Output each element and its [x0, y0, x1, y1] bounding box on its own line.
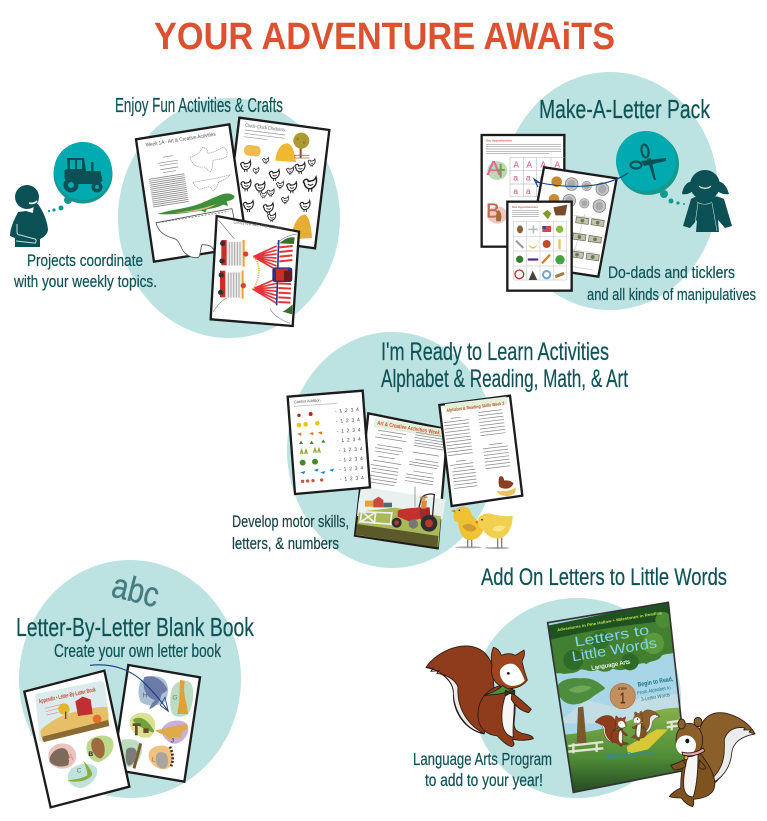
worksheet: letter grid: B [486, 199, 500, 222]
heading: letter pack: Make-A-Letter Pack [539, 94, 711, 124]
worksheet: coins and bills [526, 167, 617, 277]
icon: girl [682, 170, 732, 232]
worksheet: letter grid: a [513, 173, 518, 183]
book cover: Begin to Read, [637, 676, 674, 689]
worksheet: letter grid [482, 135, 564, 247]
caption: coordinate projects: Projects coordinate [27, 251, 143, 270]
worksheet: garden addition: - 1 2 3 4 [335, 407, 359, 415]
worksheet: letter grid: a [513, 186, 518, 196]
page: animal letters G to L: G [172, 694, 178, 701]
worksheet: alphabet and reading skills: Alphabet & Reading Skills Week 2 [446, 401, 505, 413]
background circle: letter pack [502, 72, 718, 310]
worksheet: object pictures: Our Apprehension [512, 205, 538, 209]
background circle: little words [473, 598, 681, 798]
caption: coordinate projects: with your weekly topics. [13, 272, 157, 291]
worksheet: circus wagons and tents: Circus Animals: Ants & Tents [233, 219, 282, 230]
book cover: Letters to [573, 621, 650, 650]
panel: ready to learn activities [232, 332, 628, 568]
letter pack worksheets [482, 135, 617, 291]
worksheet: letter grid: A [514, 159, 520, 169]
heading: crafts: Enjoy Fun Activities & Crafts [115, 95, 283, 117]
background circle: ready to learn [287, 332, 497, 568]
craft worksheets [136, 118, 329, 326]
worksheet: art and creative activities: Art & Creative Activities Week [377, 421, 441, 437]
worksheet: garden addition [288, 391, 370, 494]
worksheet: chicks: Cluck-Cluck Chickens [245, 123, 286, 134]
book cover: 1 [620, 690, 625, 707]
worksheet: garden addition: - 1 2 3 4 [340, 475, 364, 483]
page: appendix letters A to C: Appendix • Letter-By-Letter Book [38, 687, 97, 705]
worksheet: letter grid: a [526, 186, 531, 196]
book cover: Language Arts [591, 660, 631, 672]
caption: motor skills: letters, & numbers [232, 534, 339, 553]
icon: abc text: abc [108, 566, 163, 615]
caption: language arts program [413, 749, 552, 790]
worksheet: object pictures [507, 202, 572, 291]
caption: language arts program: to add to your year! [425, 770, 543, 790]
icon: left chick [451, 507, 483, 548]
page: animal letters G to L: H [142, 691, 148, 700]
illustration: two chicks [451, 507, 513, 549]
worksheet: garden addition: Garden Addition [294, 397, 321, 404]
icon: right chick [474, 513, 513, 549]
heading: ready to learn [381, 338, 628, 393]
book cover: Little Words [571, 634, 658, 664]
book cover: From Alphabet to [637, 685, 671, 697]
worksheet: letter grid: A [555, 159, 561, 169]
worksheet: chicks [225, 118, 329, 248]
worksheet: garden addition: - 1 2 3 4 [338, 446, 363, 454]
panel: letters to little words [413, 564, 755, 807]
panel: fun activities and crafts [10, 95, 340, 338]
title: YOUR ADVENTURE AWAiTS [154, 16, 615, 58]
caption: coordinate projects [13, 251, 157, 291]
caption: motor skills: Develop motor skills, [232, 512, 349, 531]
worksheet: garden addition: - 1 2 3 4 [339, 456, 363, 464]
book cover [546, 601, 684, 794]
page: appendix letters A to C: B [88, 751, 93, 758]
worksheet: letter grid: a [526, 173, 531, 183]
caption: manipulatives [587, 263, 756, 304]
panel: make-a-letter pack [482, 72, 756, 310]
icon: person [10, 185, 48, 247]
thinking person with tractor bubble [10, 142, 112, 247]
icon: arrow to worksheet [534, 173, 628, 187]
worksheet: garden addition: - 1 2 3 4 [336, 417, 360, 425]
worksheet: letter grid: a [540, 173, 545, 183]
background circle: crafts [118, 98, 340, 338]
worksheet: letter grid: Our Apprehension [486, 138, 512, 142]
arrow: page pointer [90, 665, 168, 711]
page: animal letters G to L [113, 665, 200, 782]
caption: manipulatives: Do-dads and ticklers [608, 263, 735, 282]
book cover: STEP [618, 687, 627, 691]
page: appendix letters A to C [24, 671, 129, 807]
worksheet: garden addition: - 1 2 3 4 [339, 465, 364, 473]
background circle: blank book [19, 560, 241, 798]
worksheet: alligator cut-out [136, 124, 247, 262]
heading: blank book: Letter-By-Letter Blank Book [16, 612, 255, 642]
book cover: WinterPromise [605, 749, 655, 761]
page: appendix letters A to C: A [68, 753, 74, 762]
worksheet: alligator cut-out: Week 1A - Art & Creative Activities [145, 132, 216, 149]
blank book pages [24, 665, 200, 807]
icon: girl with scissors bubble [534, 131, 732, 232]
worksheet: circus wagons and tents [211, 216, 299, 326]
caption: motor skills [232, 512, 349, 553]
caption: language arts program: Language Arts Program [413, 749, 552, 769]
page: animal letters G to L: J [171, 737, 174, 744]
page: appendix letters A to C: C [77, 767, 82, 774]
worksheet: garden addition: - 1 2 3 4 [337, 437, 361, 444]
worksheet: letter grid: A [527, 159, 533, 169]
worksheet: letter grid: A [487, 157, 501, 180]
illustration: brown squirrel [669, 713, 755, 807]
book cover: 3-Letter Words [641, 692, 671, 703]
worksheet: alphabet and reading skills [439, 396, 522, 506]
worksheet: letter grid: A [541, 159, 547, 169]
subheading: blank book: Create your own letter book [54, 641, 222, 661]
icon: scissors speech bubble [616, 131, 685, 205]
worksheet: letter grid: a [540, 186, 545, 196]
icon: tractor speech bubble [48, 142, 112, 212]
heading: ready to learn: Alphabet & Reading, Math, & Art [381, 365, 628, 393]
worksheet: art and creative activities [355, 413, 448, 548]
worksheet: garden addition: - 1 2 3 4 [336, 427, 361, 435]
illustration: red squirrel [426, 646, 533, 747]
page: animal letters G to L: L [152, 757, 156, 764]
learning worksheets [288, 391, 522, 548]
book cover: Adventures in Pine Hollow + Milestones in Reading [557, 610, 663, 632]
panel: letter-by-letter blank book [16, 560, 255, 807]
heading: ready to learn: I'm Ready to Learn Activities [381, 338, 609, 366]
